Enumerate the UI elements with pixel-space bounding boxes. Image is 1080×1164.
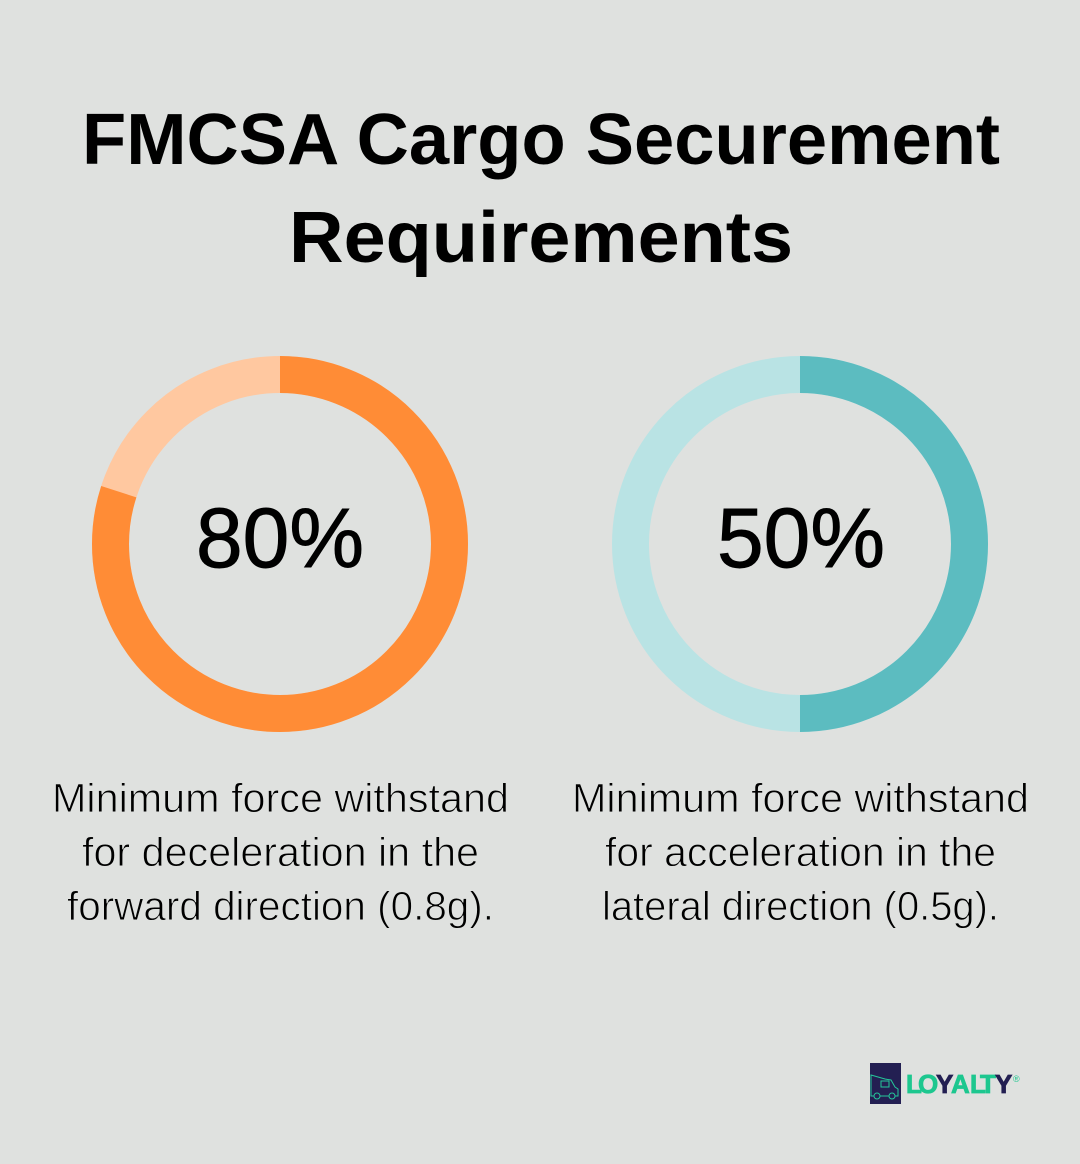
registered mark: ® — [1013, 1074, 1020, 1084]
icon: truck badge — [870, 1063, 901, 1104]
donut chart: 80% — [110, 374, 450, 714]
donut value: 50%: 50% — [717, 491, 885, 585]
donut value: 80%: 80% — [196, 491, 364, 585]
title — [82, 100, 1000, 278]
text block: acceleration description — [572, 775, 1029, 929]
text block: deceleration description: Minimum force withstand — [52, 775, 509, 821]
text block: acceleration description: Minimum force withstand — [572, 775, 1029, 821]
wordmark: LOYALTY — [906, 1069, 1012, 1099]
title: FMCSA Cargo Securement — [82, 100, 1000, 180]
title: Requirements — [289, 198, 793, 278]
text block: acceleration description: lateral direction (0.5g). — [602, 883, 999, 929]
text block: deceleration description: forward direction (0.8g). — [67, 883, 494, 929]
text block: acceleration description: for acceleration in the — [605, 829, 996, 875]
logo: Loyalty — [870, 1063, 1020, 1104]
text block: deceleration description: for deceleration in the — [82, 829, 479, 875]
donut chart: 50% — [630, 374, 970, 714]
text block: deceleration description — [52, 775, 509, 929]
